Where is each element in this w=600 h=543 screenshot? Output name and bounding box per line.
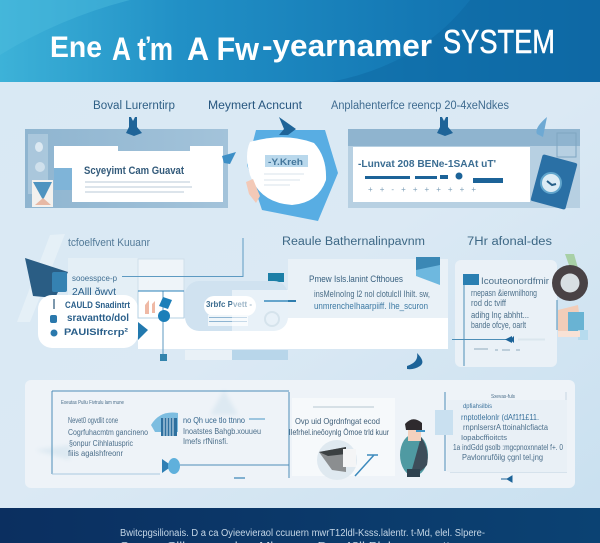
panel: right notes card: bande ofcye, oarlt xyxy=(471,320,526,330)
panel: center information block: insMeInoIng l2 nol clotulcII Ihilt. sw, xyxy=(314,289,430,299)
list text: 2Alll ðwvt xyxy=(72,286,116,298)
block 1 text: Nevet0 ogvdlit cone xyxy=(68,416,118,425)
list text: CAULD Snadintrt xyxy=(65,300,130,310)
panel: center information block: unmrencheIhaarpiiff. Ihe_scuron xyxy=(314,301,428,311)
panel: bottom summary: Ovp uid Ogrdnfngat ecod xyxy=(295,416,380,426)
panel: right notes card xyxy=(452,260,557,367)
panel: left account card xyxy=(25,129,236,208)
panel: bottom summary xyxy=(25,380,575,488)
icon: corner image xyxy=(416,257,440,285)
title: A Fw xyxy=(187,31,259,67)
panel: right notes card: rnepasn &ierwnilhong xyxy=(471,288,537,298)
panel: center speech blob xyxy=(246,130,338,221)
timeline marks: + + - + + + + + + + xyxy=(368,185,476,194)
panel: right timeline card xyxy=(348,117,580,210)
icon: document scan xyxy=(151,412,178,436)
panel: bottom summary: 1a indGdd gsolb :mgcpnoxnnatel f+. 0 xyxy=(453,443,563,452)
timeline bars xyxy=(365,172,503,183)
icon: blue fish xyxy=(162,458,180,474)
panel: right notes card: adihg lnç abhht... xyxy=(471,310,529,320)
panel: center information block xyxy=(288,257,448,369)
panel: right notes card: rod dc tviff xyxy=(471,298,506,308)
icon: arrow flag xyxy=(222,152,236,164)
title: Ene xyxy=(50,31,102,64)
list text: sravantto/dol xyxy=(67,313,129,324)
panel: bottom summary: dpfiahsilbis xyxy=(463,404,492,410)
icon: triangle picture xyxy=(32,180,53,207)
panel: bottom summary: Iopabcffioitcts xyxy=(461,435,508,442)
panel: central form card: 3rbfc Pvett - xyxy=(206,299,252,309)
block 2 text: no Qh uce tlo ttnno xyxy=(183,415,245,425)
title: A ťm xyxy=(112,31,173,67)
icon: connector center xyxy=(279,117,296,135)
icons: list bullets xyxy=(50,299,58,336)
footer text: Bwitcpgsilionais. D a ca Oyieevieraol ccuuern mwrT12ldl-Ksss.lalentr. t-Md, elel. Slpere- xyxy=(120,528,485,539)
list text xyxy=(64,274,130,338)
icon: hand xyxy=(246,179,260,203)
block 2 text: Inoatstes Bahgb.xouueu xyxy=(183,426,261,436)
block 1 text xyxy=(61,400,148,458)
section labels row 1: Meymert Acncunt xyxy=(208,100,303,112)
icon: decorative hand xyxy=(558,305,588,340)
block 2 text: Imefs rfNinsfi. xyxy=(183,436,228,446)
panel: bottom summary: Sxevas-fuls xyxy=(491,394,515,400)
arrow xyxy=(355,455,378,476)
icon: person xyxy=(400,419,428,477)
section labels row 2: Reaule Bathernalinpavnm xyxy=(282,236,425,248)
header band xyxy=(0,0,600,82)
title xyxy=(50,23,555,67)
panel: bottom summary: lIefrhel.ineôoynlg Ömoe trld kuur xyxy=(289,427,389,437)
block 1 text: Exeutas Pullu Fivtrulu lam mune xyxy=(61,400,124,406)
panel: right notes card: Icouteonordfmir xyxy=(481,276,549,286)
panel: center information block: Pmew Isls.lanint Cfthoues xyxy=(309,274,403,284)
title: -yearnamer xyxy=(262,28,432,63)
section labels row 2: 7Hr afonal-des xyxy=(467,236,552,248)
icon: dark ring badge xyxy=(552,254,588,340)
panel: bottom summary: Pavlonrufôilg çgnl tel,jng xyxy=(462,453,543,462)
section labels row 2 xyxy=(68,236,552,249)
panel: center speech blob: -Y.Kreh xyxy=(268,157,303,167)
panel: flow connector lines xyxy=(122,238,284,361)
icon: portrait circle xyxy=(317,440,357,480)
page background xyxy=(0,82,600,508)
panel: wide white band xyxy=(138,318,448,349)
card text lines xyxy=(85,182,192,192)
section labels row 1: Boval Lurerntirp xyxy=(93,100,175,112)
block 2 text xyxy=(183,415,265,446)
panel: bottom summary: rnpnlsersrA ttoinahlcfiacta xyxy=(463,423,549,432)
block 1 text: Cogrfuhacmtm gancineno xyxy=(68,428,148,437)
panel: central form card xyxy=(185,281,298,360)
icon: connector right xyxy=(437,117,453,136)
block 1 text: §onpur Cihhlatuspric xyxy=(69,439,133,448)
section labels row 2: tcfoelfvent Kuuanr xyxy=(68,237,150,249)
timeline heading: -Lunvat 208 BENe-1SAAt uT' xyxy=(358,158,496,170)
block 4 xyxy=(447,400,567,472)
block 3 xyxy=(292,398,395,476)
icon: dark folder xyxy=(25,258,68,298)
title: SYSTEM xyxy=(443,23,555,60)
list text: PAUlSIfrcrp² xyxy=(64,327,128,338)
card heading: Scyeyimt Cam Guavat xyxy=(84,165,184,177)
icon: connector left xyxy=(126,117,142,136)
panel: bottom summary: rnptotlelonlr (dAf1f1£11. xyxy=(461,413,539,422)
panel: left payment methods xyxy=(17,234,138,348)
section labels row 1: Anplahenterfce reencp 20-4xeNdkes xyxy=(331,100,509,112)
list text: sooesspce-p xyxy=(72,274,118,283)
icon: drop xyxy=(536,117,547,137)
icon: tag with clock xyxy=(530,154,578,210)
icon: curved mark xyxy=(407,353,422,369)
footer band xyxy=(0,508,600,543)
section labels row 1 xyxy=(93,100,509,112)
block 1 text: fiiis agalshfreonr xyxy=(68,449,123,458)
frame lines xyxy=(52,391,567,478)
footer text xyxy=(120,528,485,543)
